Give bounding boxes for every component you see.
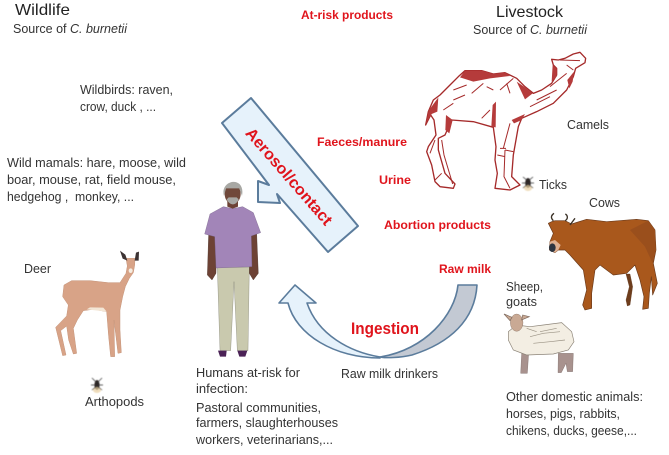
icon: cow (548, 213, 657, 310)
icon: tick (522, 177, 534, 191)
text: wild mammals: boar, mouse, rat, field mouse, (7, 173, 176, 187)
text: other domestic animals: chikens, ducks, geese,... (506, 424, 637, 438)
heading: at-risk products: At-risk products (301, 8, 393, 22)
label: raw milk: Raw milk (439, 262, 491, 276)
text: wild mammals (7, 156, 186, 204)
label: arthropods: Arthopods (85, 395, 144, 409)
icon: human (205, 182, 261, 357)
heading: livestock: Source of C. burnetii (473, 23, 588, 37)
label: ingestion: Ingestion (351, 319, 419, 338)
text: other domestic animals: horses, pigs, rabbits, (506, 407, 620, 421)
text: wildbirds (80, 83, 173, 114)
arrow: aerosol/contact (222, 98, 358, 252)
label: raw milk drinkers: Raw milk drinkers (341, 367, 438, 381)
text: wild mammals: hedgehog , monkey, ... (7, 190, 134, 204)
icon: arthropod (91, 378, 103, 393)
heading: wildlife: Source of C. burnetii (13, 22, 128, 36)
heading: wildlife: Wildlife (15, 2, 70, 19)
label: cows: Cows (589, 196, 620, 210)
text: wildbirds: crow, duck , ... (80, 100, 156, 114)
hair and beard (223, 182, 242, 204)
text: humans at risk: infection: (196, 382, 248, 396)
label: sheep and goats: Sheep, (506, 280, 543, 294)
legs (217, 267, 249, 351)
text: humans at risk (195, 366, 338, 447)
text: other domestic animals: Other domestic animals: (506, 390, 643, 404)
arms (207, 233, 258, 280)
heading: livestock: Livestock (496, 4, 564, 21)
icon: sheep (504, 314, 574, 373)
icon: camel (426, 52, 586, 190)
heading: livestock (473, 4, 588, 37)
text: wildbirds: Wildbirds: raven, (80, 83, 173, 97)
label: sheep and goats: goats (506, 295, 537, 309)
label: sheep and goats (506, 280, 543, 309)
heading: wildlife (13, 2, 128, 36)
label: deer: Deer (24, 262, 51, 276)
text: humans at risk: farmers, slaughterhouses (196, 416, 338, 430)
label: faeces/manure: Faeces/manure (317, 135, 407, 149)
text: humans at risk: Pastoral communities, (196, 401, 321, 415)
arrow: aerosol/contact: Aerosol/contact (242, 125, 336, 230)
text: wild mammals: Wild mamals: hare, moose, wild (7, 156, 186, 170)
text: other domestic animals (506, 390, 643, 438)
shoes (218, 351, 247, 357)
label: ticks: Ticks (539, 178, 567, 192)
arrow: ingestion (279, 285, 477, 358)
icon: deer (56, 251, 139, 357)
shirt (205, 207, 261, 268)
label: urine: Urine (379, 173, 411, 187)
label: abortion products: Abortion products (384, 218, 491, 232)
text: humans at risk: Humans at-risk for (196, 366, 300, 380)
neck and face (227, 200, 238, 209)
text: humans at risk: workers, veterinarians,... (195, 433, 333, 447)
label: camels: Camels (567, 118, 609, 132)
